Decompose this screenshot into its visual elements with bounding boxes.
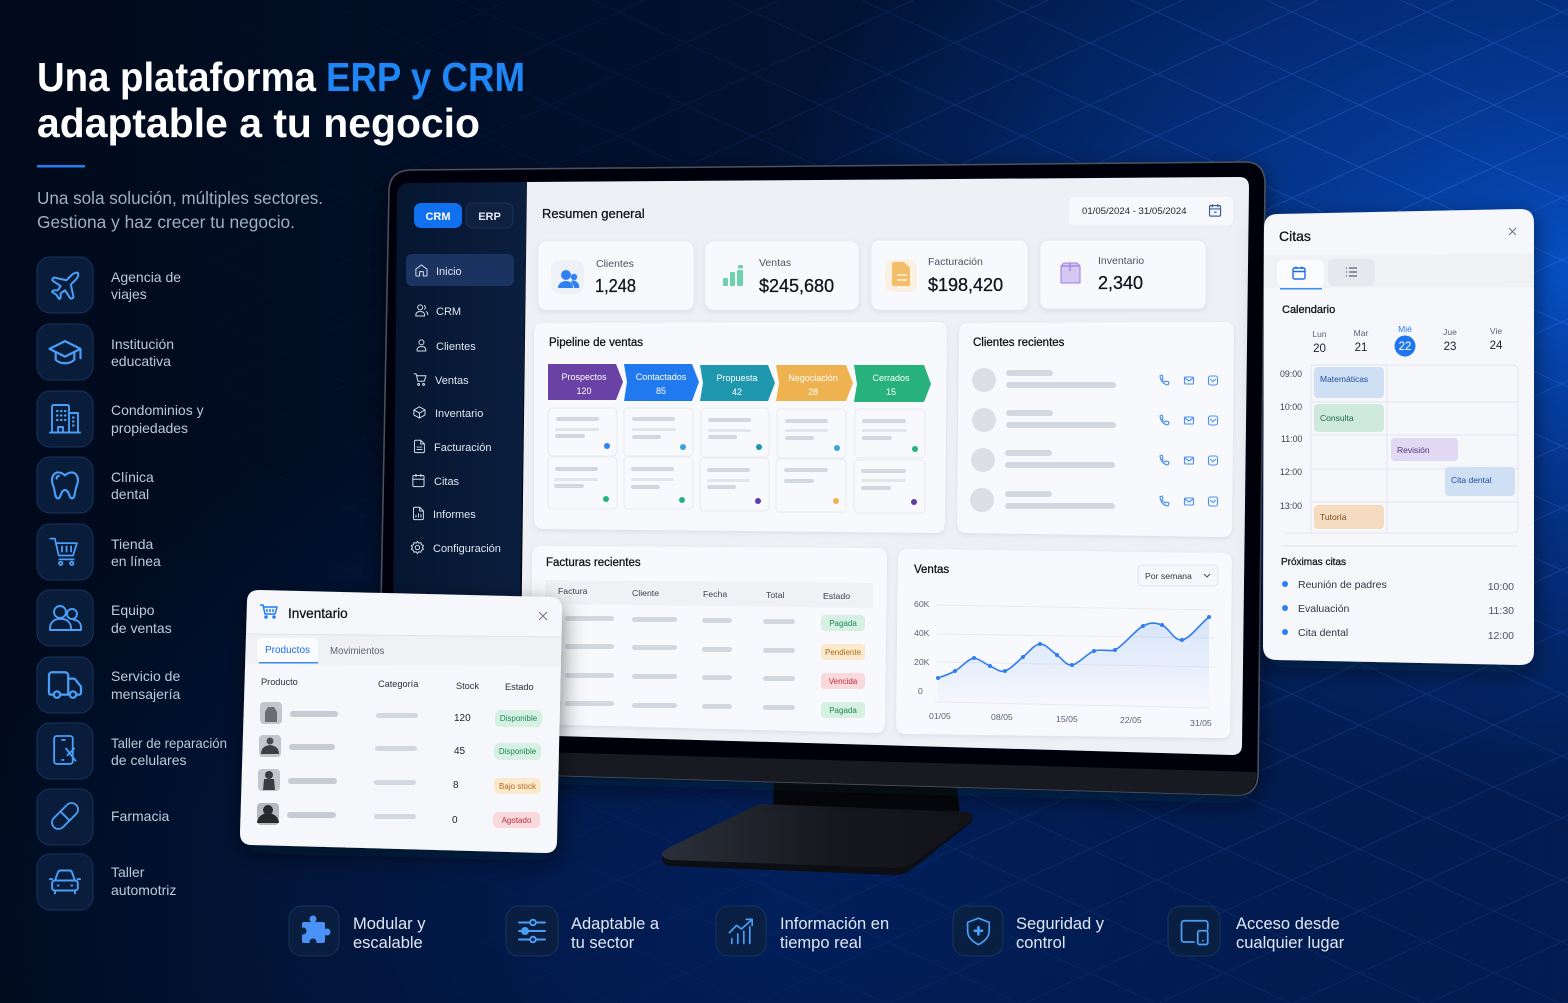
sector: condominios — [37, 391, 204, 447]
period dropdown: Por semana — [1145, 571, 1192, 581]
inventory tab strip — [246, 635, 561, 666]
calendar week days: 24 — [1490, 340, 1503, 352]
nav: inventario — [414, 407, 483, 420]
kpi: facturación: $198,420 — [928, 275, 1003, 295]
nav: ventas: Ventas — [435, 375, 469, 387]
nav: inicio: Inicio — [436, 266, 462, 278]
kpi: inventario: 2,340 — [1098, 273, 1143, 293]
inventory column headers: Producto — [261, 677, 298, 687]
feature: seguridad y control — [953, 906, 1105, 956]
stage: prospectos: Prospectos — [561, 372, 607, 382]
nav: citas — [413, 474, 460, 488]
date range box: 01/05/2024 - 31/05/2024 — [1082, 206, 1187, 217]
product row 2: 45 — [454, 746, 466, 757]
calendar week days: 22 — [1399, 341, 1411, 353]
inventory column headers: Categoría — [378, 679, 419, 689]
feature row — [289, 906, 1345, 956]
monitor bezel — [378, 162, 1265, 795]
product row 3: Bajo stock — [499, 782, 537, 791]
kpi: inventario: Inventario — [1098, 255, 1144, 267]
calendar week days: 23 — [1444, 341, 1456, 353]
sector list — [37, 257, 227, 910]
product row 4: Agotado — [502, 816, 532, 825]
stage: propuesta: 42 — [732, 387, 742, 397]
kpi: ventas: $245,680 — [759, 276, 834, 296]
title — [37, 54, 525, 146]
stage: negociación: 28 — [808, 387, 818, 397]
feature: información en tiempo real: Información en — [780, 915, 889, 933]
sector: taller automotriz: automotriz — [111, 882, 176, 898]
sector: condominios: Condominios y — [111, 402, 204, 418]
panel: citas — [1263, 209, 1534, 665]
stage: cerrados: 15 — [886, 387, 896, 397]
feature: adaptable a tu sector — [506, 906, 660, 956]
nav: facturación — [414, 440, 491, 454]
product row 2 — [259, 735, 541, 760]
pipeline cards — [548, 408, 925, 513]
stage: propuesta — [700, 365, 775, 401]
sector: equipo de ventas: Equipo — [111, 602, 155, 618]
event: revisión — [1391, 438, 1458, 461]
monitor screen — [520, 177, 1249, 755]
subtitle — [37, 188, 323, 232]
citas tab: list — [1328, 259, 1375, 286]
client row 1 — [972, 368, 1218, 392]
y axis labels — [914, 599, 930, 696]
product row 1 — [260, 702, 542, 727]
sector: equipo de ventas — [37, 590, 172, 646]
stage: propuesta: Propuesta — [716, 373, 758, 383]
y axis labels: 0 — [918, 686, 923, 696]
sector: tienda en línea — [37, 524, 161, 580]
feature: adaptable a tu sector: tu sector — [571, 934, 635, 952]
kpi: inventario — [1040, 240, 1206, 309]
sector: taller automotriz — [37, 854, 176, 910]
title: Una plataforma — [37, 54, 317, 100]
sector: tienda en línea: Tienda — [111, 536, 154, 552]
y axis labels: 20K — [914, 657, 930, 667]
nav: inventario: Inventario — [435, 408, 483, 420]
sector: taller de celulares: Taller de reparación — [111, 735, 227, 751]
invoice row 3: Vencida — [829, 677, 858, 686]
feature: seguridad y control: Seguridad y — [1016, 915, 1105, 933]
sector: clínica dental — [37, 457, 154, 513]
invoice table header: Estado — [823, 591, 850, 601]
event: matemáticas: Matemáticas — [1320, 374, 1368, 384]
sector: servicio de mensajería — [37, 657, 180, 713]
citas heading: Citas — [1279, 228, 1311, 244]
product row 4 — [257, 803, 540, 828]
próximas citas — [1281, 557, 1514, 642]
product row 3 — [258, 769, 541, 794]
kpi: ventas: Ventas — [759, 257, 791, 269]
sector: institución educativa — [37, 324, 174, 380]
sector: agencia de viajes: viajes — [111, 286, 147, 302]
panel: inventario — [240, 590, 562, 853]
nav: crm — [416, 305, 461, 318]
event: consulta: Consulta — [1320, 413, 1354, 423]
monitor — [378, 162, 1265, 795]
y axis labels: 40K — [914, 628, 930, 638]
nav: clientes: Clientes — [436, 341, 476, 353]
stage: negociación — [776, 365, 853, 401]
calendar times: 11:00 — [1281, 434, 1302, 444]
title: ERP y CRM — [326, 54, 525, 100]
calendar grid — [1285, 365, 1518, 533]
sector: clínica dental: Clínica — [111, 469, 154, 485]
event: consulta — [1314, 404, 1384, 432]
feature: modular y escalable: escalable — [353, 934, 423, 952]
invoice table header — [545, 580, 873, 608]
calendar week days: Jue — [1443, 327, 1457, 337]
invoice table header: Total — [766, 590, 784, 600]
panel: clientes recientes — [957, 322, 1234, 537]
próximas citas: Reunión de padres — [1298, 579, 1387, 591]
x axis labels — [929, 711, 1212, 728]
title: adaptable a tu negocio — [37, 100, 480, 146]
kpi: clientes: Clientes — [596, 258, 634, 270]
event: tutoría: Tutoría — [1320, 512, 1347, 522]
inventory column headers: Stock — [456, 681, 479, 691]
calendar heading: Calendario — [1282, 304, 1335, 316]
invoice row 4 — [565, 701, 865, 718]
próximas citas: Próximas citas — [1281, 557, 1346, 568]
invoice table header: Factura — [558, 586, 588, 596]
próximas citas: 10:00 — [1488, 581, 1514, 593]
citas heading — [1279, 228, 1516, 244]
citas tab strip — [1264, 254, 1534, 288]
period dropdown — [1138, 565, 1218, 586]
calendar week days: Lun — [1312, 329, 1327, 339]
monitor stand — [662, 775, 972, 875]
nav: citas: Citas — [434, 476, 460, 488]
sector: agencia de viajes — [37, 257, 181, 313]
event: cita dental — [1445, 467, 1515, 496]
sales line — [938, 617, 1209, 678]
stage: contactados — [624, 364, 699, 401]
title accent line — [37, 165, 85, 168]
nav: crm: CRM — [436, 306, 461, 318]
client row 4 — [970, 488, 1218, 512]
invoice row 1 — [565, 615, 865, 631]
chart axes and gridlines — [935, 605, 1215, 708]
sector: condominios: propiedades — [111, 420, 188, 436]
próximas citas: 12:00 — [1488, 630, 1514, 642]
x axis labels: 01/05 — [929, 711, 951, 721]
inventory tabs — [257, 638, 385, 664]
sales points — [936, 615, 1211, 680]
subtitle: Gestiona y haz crecer tu negocio. — [37, 212, 295, 232]
calendar week days: Mié — [1398, 324, 1412, 334]
event: tutoría — [1314, 505, 1384, 529]
product row 4: 0 — [452, 815, 458, 826]
stage: prospectos — [548, 364, 623, 400]
monitor sidebar — [392, 182, 527, 735]
invoice row 1: Pagada — [829, 619, 857, 628]
panel: ventas chart — [896, 549, 1232, 738]
sector: farmacia: Farmacia — [111, 808, 170, 824]
nav: configuración: Configuración — [433, 543, 501, 555]
calendar week days: 21 — [1355, 342, 1367, 354]
nav: clientes — [417, 340, 476, 353]
calendar times: 12:00 — [1280, 467, 1302, 477]
feature: información en tiempo real — [716, 906, 889, 956]
próximas citas: 11:30 — [1488, 605, 1514, 617]
kpi: facturación: Facturación — [928, 256, 983, 268]
feature: acceso desde cualquier lugar: Acceso desde — [1236, 915, 1340, 933]
nav: inicio — [416, 265, 462, 278]
feature: acceso desde cualquier lugar — [1168, 906, 1345, 956]
kpi: facturación — [871, 240, 1028, 310]
citas tab: calendar — [1277, 260, 1324, 290]
sector: equipo de ventas: de ventas — [111, 620, 172, 636]
crm toggle button — [414, 203, 462, 228]
kpi: clientes — [538, 241, 694, 310]
calendar week days: Mar — [1354, 328, 1368, 338]
inventory tabs: Productos — [265, 645, 310, 656]
event: revisión: Revisión — [1397, 445, 1430, 455]
sector: taller automotriz: Taller — [111, 864, 145, 880]
stage: contactados: 85 — [656, 386, 666, 396]
sector: agencia de viajes: Agencia de — [111, 269, 181, 285]
stage: cerrados: Cerrados — [872, 373, 910, 383]
sector: institución educativa: Institución — [111, 336, 174, 352]
crm toggle button: CRM — [425, 211, 451, 223]
x axis labels: 15/05 — [1056, 714, 1078, 724]
stage: cerrados — [854, 365, 931, 402]
calendar times: 09:00 — [1280, 369, 1302, 379]
sector: farmacia — [37, 789, 170, 845]
nav: facturación: Facturación — [434, 442, 491, 454]
inventory column headers: Estado — [505, 682, 534, 692]
y axis labels: 60K — [914, 599, 930, 609]
active nav pill — [406, 254, 514, 286]
sector: servicio de mensajería: mensajería — [111, 686, 180, 702]
subtitle: Una sola solución, múltiples sectores. — [37, 188, 323, 208]
calendar times — [1280, 369, 1302, 511]
inventory header: Inventario — [288, 606, 348, 621]
product row 1: 120 — [454, 713, 471, 724]
próximas citas: Cita dental — [1298, 627, 1348, 639]
monitor chin — [540, 752, 1257, 795]
feature: modular y escalable: Modular y — [353, 915, 426, 933]
screen heading: Resumen general — [542, 206, 645, 221]
calendar week days: Vie — [1490, 326, 1502, 336]
product row 3: 8 — [453, 780, 459, 791]
stage: prospectos: 120 — [576, 386, 592, 396]
nav: informes: Informes — [433, 509, 476, 521]
invoice table header: Cliente — [632, 588, 659, 598]
invoice row 3 — [565, 673, 865, 689]
divider — [1281, 545, 1518, 547]
date range box — [1068, 196, 1234, 226]
panel: ventas chart: Ventas — [914, 564, 949, 576]
calendar times: 13:00 — [1280, 501, 1302, 511]
inventory column headers — [261, 677, 534, 692]
panel: clientes recientes: Clientes recientes — [973, 337, 1065, 349]
event: cita dental: Cita dental — [1451, 475, 1492, 485]
sales area — [938, 617, 1209, 708]
inventory header — [260, 605, 547, 621]
sector: taller de celulares — [37, 723, 227, 779]
panel: facturas recientes — [530, 546, 887, 733]
panel: pipeline de ventas: Pipeline de ventas — [549, 337, 643, 349]
erp toggle button: ERP — [478, 211, 501, 223]
sector: clínica dental: dental — [111, 486, 149, 502]
feature: información en tiempo real: tiempo real — [780, 934, 862, 952]
kpi: clientes: 1,248 — [595, 276, 636, 296]
invoice row 2: Pendiente — [825, 648, 862, 657]
próximas citas: Evaluación — [1298, 603, 1350, 615]
sector: servicio de mensajería: Servicio de — [111, 668, 180, 684]
x axis labels: 31/05 — [1190, 718, 1212, 728]
calendar times: 10:00 — [1280, 402, 1302, 412]
panel: pipeline de ventas — [534, 322, 947, 533]
feature: adaptable a tu sector: Adaptable a — [571, 915, 660, 933]
product row 1: Disponible — [500, 714, 538, 723]
panel: facturas recientes: Facturas recientes — [546, 557, 641, 569]
invoice table header: Fecha — [703, 589, 727, 599]
x axis labels: 22/05 — [1120, 715, 1142, 725]
calendar week days: 20 — [1313, 343, 1326, 355]
feature: acceso desde cualquier lugar: cualquier lugar — [1236, 934, 1345, 952]
feature: seguridad y control: control — [1016, 934, 1066, 952]
calendar week days — [1312, 324, 1503, 356]
erp toggle button — [466, 203, 513, 228]
x axis labels: 08/05 — [991, 712, 1013, 722]
sector: taller de celulares: de celulares — [111, 752, 186, 768]
sector: institución educativa: educativa — [111, 353, 171, 369]
nav: configuración — [411, 541, 501, 555]
client row 2 — [972, 408, 1218, 432]
feature: modular y escalable — [289, 906, 426, 956]
event: matemáticas — [1314, 367, 1384, 398]
inventory tabs: Movimientos — [330, 646, 385, 657]
client row 3 — [971, 448, 1218, 472]
invoice row 4: Pagada — [829, 706, 857, 715]
product row 2: Disponible — [499, 747, 537, 756]
kpi: ventas — [705, 241, 859, 310]
stage: contactados: Contactados — [636, 372, 687, 382]
stage: negociación: Negociación — [788, 373, 838, 383]
invoice row 2 — [565, 644, 865, 660]
nav: ventas — [414, 374, 469, 387]
nav: informes — [413, 507, 476, 521]
sector: tienda en línea: en línea — [111, 553, 161, 569]
